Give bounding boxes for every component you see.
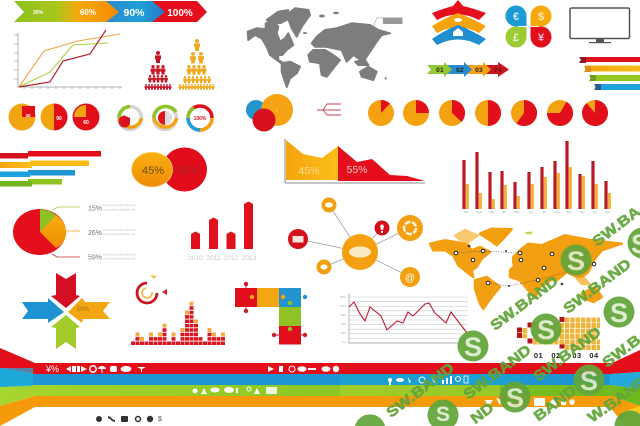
watermark: SW.BAND repeated — [355, 204, 640, 426]
currency petals: € — [513, 11, 519, 23]
bar chart 2010-2013: 2013 — [242, 255, 257, 262]
pie chart with callouts: consectetur adipiscing elit — [103, 256, 135, 260]
currency petals: $ — [538, 11, 544, 23]
line chart red descending: 120% — [340, 296, 347, 299]
bar chart monthly red and orange: Sep — [567, 210, 572, 214]
top percentage arrow: 100% — [167, 8, 193, 19]
watermark: SW.BAND repeated: SW.BAND — [461, 342, 534, 403]
horizontal bar ribbons left — [0, 151, 101, 186]
people pyramid: orange — [179, 39, 214, 90]
four arrows star: 59% — [76, 306, 90, 313]
watermark: SW.BAND repeated: S — [506, 383, 524, 413]
watermark: SW.BAND repeated: S — [464, 332, 482, 362]
bar chart monthly red and orange: May — [514, 210, 520, 214]
icon: stacked arc arrows — [432, 0, 486, 45]
bar chart monthly red and orange: Apr — [502, 210, 506, 214]
colour bands across page — [0, 348, 640, 426]
line chart red descending — [340, 293, 468, 344]
network diagram — [288, 198, 423, 287]
pie chart with callouts: 15% — [88, 206, 102, 212]
pie chart with callouts — [13, 203, 136, 262]
currency petals: £ — [513, 32, 519, 44]
top percentage arrow — [14, 1, 207, 22]
small dark icons under bands — [96, 416, 162, 423]
watermark: SW.BAND repeated: SW.BAND — [488, 273, 561, 334]
two circle venn 45%: 45% — [142, 165, 164, 177]
two circle venn 45% — [132, 148, 207, 192]
white icons on bands — [45, 364, 575, 406]
line chart red descending: 60% — [341, 323, 347, 326]
bar chart monthly red and orange: Jun — [529, 210, 534, 214]
area chart 45% / 55%: 45% — [298, 165, 320, 177]
donut charts row: 100% — [194, 116, 207, 122]
top percentage arrow: 90% — [123, 7, 145, 19]
bar chart 2010-2013 — [188, 202, 257, 262]
network diagram: @ — [405, 273, 415, 284]
top percentage arrow: 60% — [80, 8, 96, 17]
orange world map with route markers — [430, 229, 622, 309]
watermark: SW.BAND repeated: SW.BAND — [384, 360, 457, 421]
bar chart monthly red and orange: Jul — [542, 210, 546, 214]
heat map grid with 01 02 03 04 — [517, 317, 600, 360]
grey world map with callout — [248, 8, 402, 87]
numbered step arrows 01 02 03 04: 02 — [456, 67, 464, 74]
bar chart 2010-2013: 2012 — [224, 255, 239, 262]
bar chart monthly red and orange: Oct — [593, 210, 597, 214]
heat map grid with 01 02 03 04: 01 — [534, 351, 543, 360]
bar chart monthly red and orange: Feb — [477, 210, 482, 214]
area chart 45% / 55% — [285, 139, 425, 183]
numbered step arrows 01 02 03 04: 03 — [475, 67, 483, 74]
percentage dials row: 90 — [56, 116, 62, 122]
pie chart with callouts: consectetur adipiscing elit — [103, 208, 135, 212]
watermark: SW.BAND repeated: S — [436, 403, 450, 426]
watermark: SW.BAND repeated: S — [537, 315, 555, 345]
small dark icons under bands: $ — [158, 416, 162, 423]
watermark: SW.BAND repeated: SW.BAND — [531, 324, 604, 385]
currency petals: ¥ — [538, 32, 545, 44]
numbered step arrows 01 02 03 04: 04 — [494, 67, 502, 74]
equalizer block chart — [133, 301, 223, 345]
watermark: SW.BAND repeated: SW.BAND — [561, 256, 634, 317]
bar chart monthly red and orange: Dec — [606, 210, 611, 214]
pie chart with callouts: lorem ipsum dolor sit amet — [103, 252, 136, 256]
line chart red descending: 40% — [341, 332, 347, 335]
watermark: SW.BAND repeated: BAND — [531, 383, 580, 425]
watermark: SW.BAND repeated: S — [610, 298, 628, 328]
white icons on bands: ¥% — [45, 364, 59, 374]
percentage dials row — [8, 104, 100, 130]
heat map grid with 01 02 03 04: 02 — [551, 351, 561, 360]
line chart red descending: 0% — [342, 341, 347, 344]
pie series — [368, 100, 608, 126]
heat map grid with 01 02 03 04: 04 — [589, 351, 599, 360]
three circle venn — [246, 94, 293, 132]
pie chart with callouts: 59% — [88, 254, 102, 262]
numbered step arrows 01 02 03 04: 01 — [436, 67, 444, 74]
heat map grid with 01 02 03 04: 03 — [572, 351, 582, 360]
people pyramid: red — [145, 51, 171, 90]
pie chart with callouts: consectetur adipiscing elit — [103, 232, 135, 236]
pie chart with callouts: lorem ipsum dolor sit amet — [103, 203, 136, 207]
two circle venn 45%: 55% — [177, 165, 199, 177]
top percentage arrow: 30% — [33, 10, 44, 16]
line chart red descending: 100% — [340, 305, 347, 308]
three circle venn: 1 — [276, 108, 279, 113]
ribbons top right — [579, 57, 640, 90]
percentage dials row: 30 — [25, 113, 31, 118]
icon: monitor — [570, 8, 630, 43]
line chart red descending: 80% — [341, 314, 347, 317]
bar chart 2010-2013: 2011 — [207, 255, 221, 262]
line chart: three rising lines — [14, 30, 122, 89]
currency petals — [506, 6, 552, 48]
watermark: SW.BAND repeated: S — [580, 366, 598, 396]
percentage dials row: 60 — [83, 120, 89, 126]
puzzle pieces — [235, 282, 307, 344]
watermark: SW.BAND repeated: S — [567, 246, 585, 276]
bar chart monthly red and orange: Nov — [580, 210, 585, 214]
four arrows star — [22, 273, 110, 349]
bar chart 2010-2013: 2010 — [188, 255, 203, 262]
bar chart monthly red and orange: Aug — [555, 210, 560, 214]
icon: target with arrow — [137, 275, 167, 303]
pie chart with callouts: 26% — [88, 230, 102, 237]
numbered step arrows 01 02 03 04 — [427, 62, 509, 77]
bar chart monthly red and orange — [464, 141, 611, 214]
pie chart with callouts: lorem ipsum dolor sit amet — [103, 228, 136, 232]
donut charts row — [118, 106, 212, 130]
icon: trident — [317, 104, 341, 115]
bar chart monthly red and orange: Mar — [490, 210, 494, 214]
area chart 45% / 55%: 55% — [346, 164, 368, 176]
bar chart monthly red and orange: Jan — [464, 210, 469, 214]
